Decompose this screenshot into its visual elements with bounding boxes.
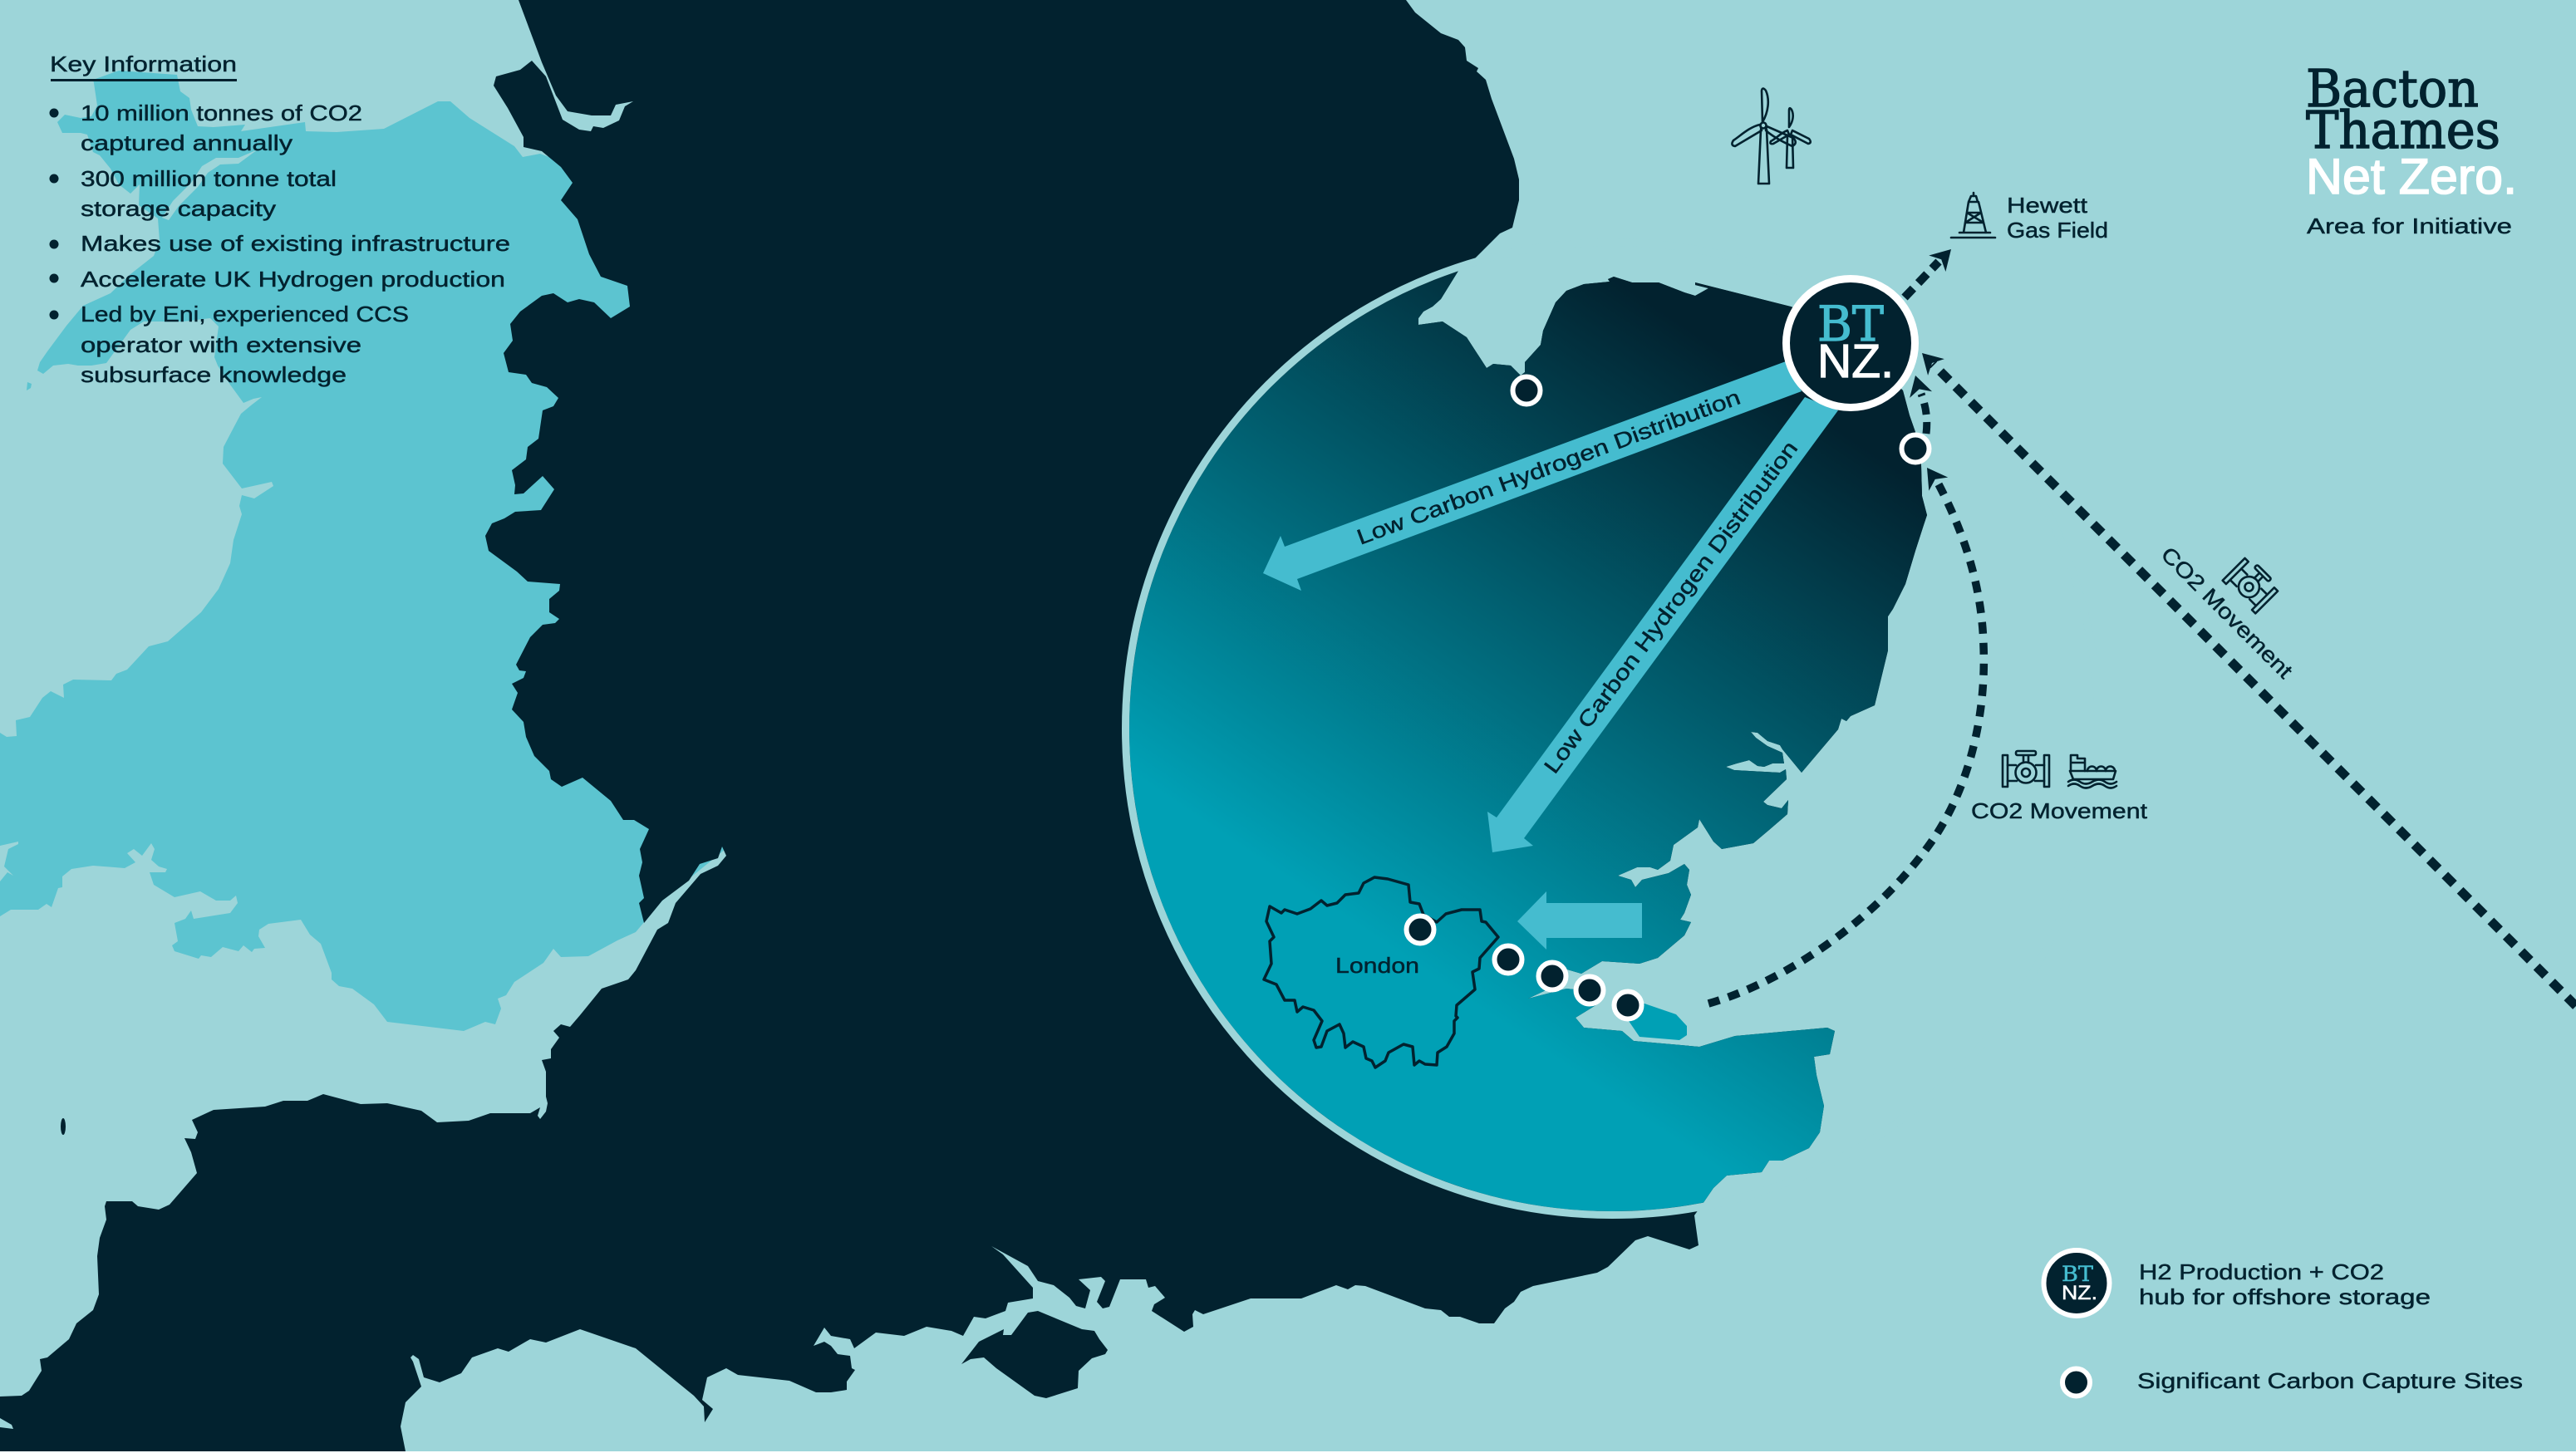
dashed arrow: to Hewett Gas Field (1905, 241, 1959, 297)
arrow label: hydrogen distribution west: Low Carbon Hydrogen Distribution (1354, 385, 1743, 550)
bullet: Eni: Led by Eni, experienced CCS (81, 302, 409, 326)
map: Sheppey island (1629, 1004, 1687, 1040)
legend: capture site text: Significant Carbon Capture Sites (2137, 1368, 2523, 1393)
bullet: infrastructure: Makes use of existing infrastructure (81, 231, 510, 256)
bullet: Eni: subsurface knowledge (81, 362, 347, 387)
bullet: captured (81, 101, 362, 155)
icon: ship (2068, 755, 2116, 788)
heading underline (51, 79, 237, 81)
heading: Key Information: Key Information (50, 52, 237, 76)
Hewett Gas Field label (2007, 193, 2108, 243)
arrow: hydrogen distribution south-west (1487, 397, 1838, 852)
arrow: towards London (1517, 891, 1642, 950)
caption: Area for Initiative: Area for Initiative (2307, 214, 2512, 238)
dashed arrow: offshore CO2 movement (1914, 345, 2576, 1006)
logo: Bacton Thames Net Zero (2306, 58, 2517, 204)
logo: Bacton Thames Net Zero: Thames (2306, 100, 2500, 160)
bullet: storage: storage capacity (81, 196, 276, 221)
bullet: Eni: operator with extensive (81, 332, 361, 357)
BTNZ hub badge (1787, 279, 1915, 407)
legend: hub text: hub for offshore storage (2139, 1284, 2431, 1309)
dashed arrow: coastal site to hub (1905, 372, 1932, 434)
icon: rotated valve (2223, 555, 2281, 613)
label: CO2 Movement offshore: CO2 Movement (2156, 542, 2298, 684)
icon: wind turbines (1732, 88, 1811, 184)
bullet dots (50, 108, 58, 319)
bullet: hydrogen: Accelerate UK Hydrogen production (81, 267, 505, 292)
bullet: captured: captured annually (81, 130, 293, 155)
London outline (1264, 877, 1498, 1068)
map: small dark lake (61, 1118, 66, 1135)
area of initiative: circle ring (1125, 243, 2099, 1215)
map: England land mass (0, 0, 1927, 1451)
key information panel (50, 52, 510, 387)
area of initiative: gradient region (1129, 271, 1927, 1211)
BTNZ hub badge: NZ. (1817, 335, 1894, 388)
legend: hub badge (2044, 1250, 2109, 1316)
bullet: storage (81, 166, 337, 221)
logo: Bacton Thames Net Zero: Net Zero. (2306, 149, 2517, 204)
Hewett Gas Field label: Gas Field (2007, 218, 2108, 243)
BTNZ hub badge: BT (1817, 296, 1884, 352)
map: Wales and north-west England (0, 71, 748, 1031)
arrow label: hydrogen distribution south-west: Low Carbon Hydrogen Distribution (1539, 436, 1802, 778)
arrow: hydrogen distribution west (1263, 361, 1802, 591)
label: CO2 Movement coastal: CO2 Movement (1971, 798, 2148, 823)
dashed arrow: Thames CO2 movement by sea (1708, 461, 1984, 1004)
legend: capture site marker (2062, 1369, 2090, 1396)
icon: valve (2003, 751, 2049, 787)
bullet: Eni (81, 302, 409, 387)
Hewett Gas Field label: Hewett (2007, 193, 2088, 218)
carbon capture sites (1406, 377, 1930, 1019)
legend: hub badge: BT (2062, 1262, 2093, 1286)
bullet: captured: 10 million tonnes of CO2 (81, 101, 362, 125)
London label: London (1335, 953, 1419, 978)
legend: hub badge: NZ. (2062, 1282, 2097, 1304)
bullet: storage: 300 million tonne total (81, 166, 337, 191)
map: small island (27, 382, 32, 390)
legend: hub text: H2 Production + CO2 (2139, 1259, 2384, 1284)
legend: hub text (2139, 1259, 2431, 1309)
icon: gas rig (1951, 193, 1995, 238)
logo: Bacton Thames Net Zero: Bacton (2306, 58, 2479, 119)
map: Isle of Wight (961, 1311, 1108, 1398)
map: river sliver (162, 150, 258, 220)
